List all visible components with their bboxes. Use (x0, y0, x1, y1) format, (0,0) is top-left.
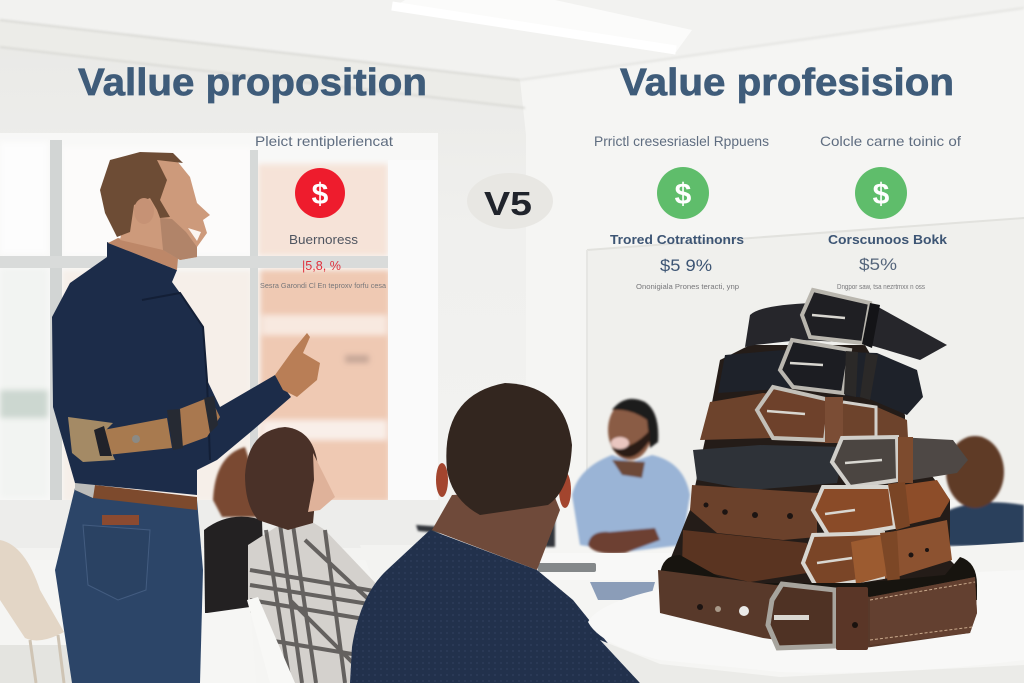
column 2 value: $5 9% (660, 256, 712, 275)
belt 6 black (718, 340, 923, 415)
woman attendee plaid (245, 427, 382, 683)
vs badge (467, 173, 553, 229)
icon: green dollar: $ (873, 178, 890, 211)
arm band belt (68, 396, 220, 462)
column 2 heading: Prrictl cresesriaslel Rppuens (594, 133, 769, 149)
column 1 (255, 133, 393, 290)
hair (100, 152, 183, 237)
jeans (55, 488, 203, 683)
ear (134, 198, 154, 224)
belt 2 brown (682, 520, 952, 588)
right back table (930, 542, 1024, 576)
column 1 label: Buernoress (289, 233, 358, 247)
column 3 heading: Colcle carne toinic of (820, 133, 961, 149)
icon: green dollar (657, 167, 709, 219)
column 3 (820, 133, 961, 291)
neck and ears (432, 490, 560, 570)
neck (108, 238, 178, 270)
presenter man (52, 152, 320, 683)
title right: Value profesision (620, 62, 954, 104)
belt 4 dark textured (693, 437, 968, 490)
belt 3 brown (690, 480, 950, 540)
column 2 note: Ononigiala Prones teracti, ynp (636, 282, 739, 291)
jeans pocket (83, 525, 150, 600)
window (0, 133, 438, 525)
belt pad (68, 417, 115, 462)
whiteboard (587, 218, 1024, 500)
icon: green dollar (855, 167, 907, 219)
jeans label (102, 515, 139, 525)
waist belt (75, 477, 197, 510)
tablet (538, 563, 596, 572)
column 1 heading: Pleict rentipleriencat (255, 133, 393, 149)
foreground round table (588, 570, 1024, 673)
foreground man head and shirt (350, 383, 640, 683)
woman attendee rear (196, 447, 265, 683)
hand thumbs up (275, 333, 320, 397)
vs badge: V5 (484, 185, 532, 222)
shirt (52, 242, 291, 495)
shirt (350, 530, 640, 683)
belt 1 bottom brown (658, 555, 977, 650)
ceiling light (392, 0, 692, 52)
window sill and low wall (0, 500, 440, 548)
back right attendee (945, 436, 1024, 546)
hair (446, 383, 572, 515)
smile (188, 228, 201, 241)
back tables (360, 545, 530, 600)
column 2 label: Trored Cotrattinonrs (610, 232, 744, 247)
column 1 value: |5,8, % (302, 258, 341, 273)
buckle pins (767, 315, 882, 563)
column 1 note: Sesra Garondi Cl En teproxv forfu cesa (260, 281, 387, 290)
belt 7 top black (745, 290, 947, 360)
arm crease (142, 293, 210, 460)
belt stack (658, 290, 977, 650)
column 3 value: $5% (859, 255, 897, 274)
icon: red dollar: $ (312, 178, 329, 211)
laptop on table (545, 515, 555, 547)
column 3 note: Dngpor saw, tsa nezrtmxx n oss (837, 282, 925, 291)
icon: red dollar (295, 168, 345, 218)
belt holes (704, 502, 929, 558)
table underside (600, 640, 1024, 683)
seated man legs (590, 582, 655, 600)
beard shade (160, 218, 197, 260)
column 3 label: Corscunoos Bokk (828, 232, 948, 247)
floor and beige chair (0, 540, 210, 683)
icon: green dollar: $ (675, 178, 692, 211)
title left: Vallue proposition (78, 62, 427, 104)
seated man table (535, 553, 682, 580)
column 2 (594, 133, 769, 291)
ceiling (0, 0, 1024, 80)
belt 5 brown (700, 387, 908, 443)
seated presenter background (416, 399, 690, 554)
face (120, 156, 210, 260)
stack backing (660, 345, 975, 585)
left wall (0, 20, 526, 560)
